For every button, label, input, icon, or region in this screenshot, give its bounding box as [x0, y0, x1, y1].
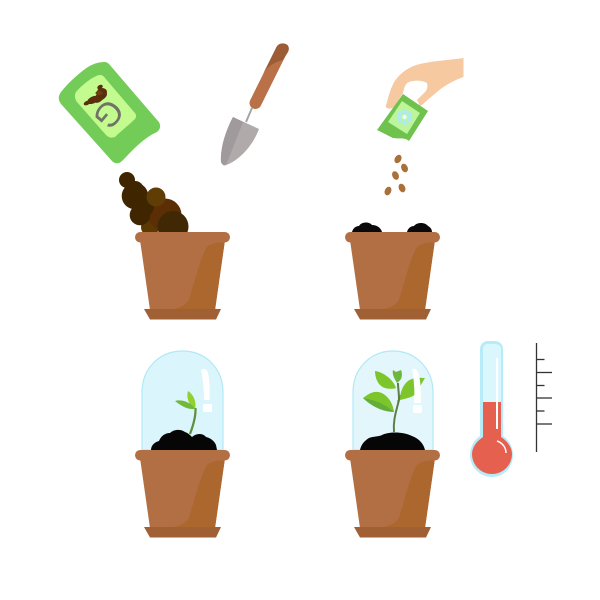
plant stem: [394, 383, 411, 432]
pot 3: [135, 450, 230, 538]
soil on label: [83, 84, 109, 106]
hand: [386, 58, 464, 109]
illustration: plant growing steps: [58, 43, 552, 538]
icon: trowel: [221, 43, 289, 165]
pot 2: [345, 232, 440, 320]
dome highlight: [412, 369, 421, 403]
packet flower: [397, 110, 412, 125]
bag label: [75, 75, 136, 138]
icon: thermometer: [470, 341, 513, 477]
soil: [360, 432, 425, 450]
seed packet: [377, 94, 428, 141]
trowel handle: [256, 50, 282, 103]
soil mounds in pot 2: [352, 222, 432, 232]
letter G on bag: G: [85, 92, 131, 136]
trowel neck: [246, 108, 252, 122]
glass dome with young plant: [353, 351, 433, 450]
glass dome with seedling: [142, 351, 223, 450]
dome highlight: [201, 369, 210, 400]
falling seeds: [383, 154, 409, 196]
trowel blade: [221, 117, 259, 165]
temperature scale: [536, 343, 552, 452]
packet label: [388, 101, 420, 134]
icon: fertilizer bag: [59, 62, 160, 163]
icon: hand holding seed packet: [377, 58, 464, 141]
pot 1: [135, 232, 230, 320]
plant leaves: [363, 392, 394, 412]
seedling: [190, 408, 196, 434]
thermometer highlights: [496, 358, 498, 429]
pot 4: [345, 450, 440, 538]
soil pile falling into pot: [119, 172, 188, 232]
soil: [151, 430, 217, 450]
